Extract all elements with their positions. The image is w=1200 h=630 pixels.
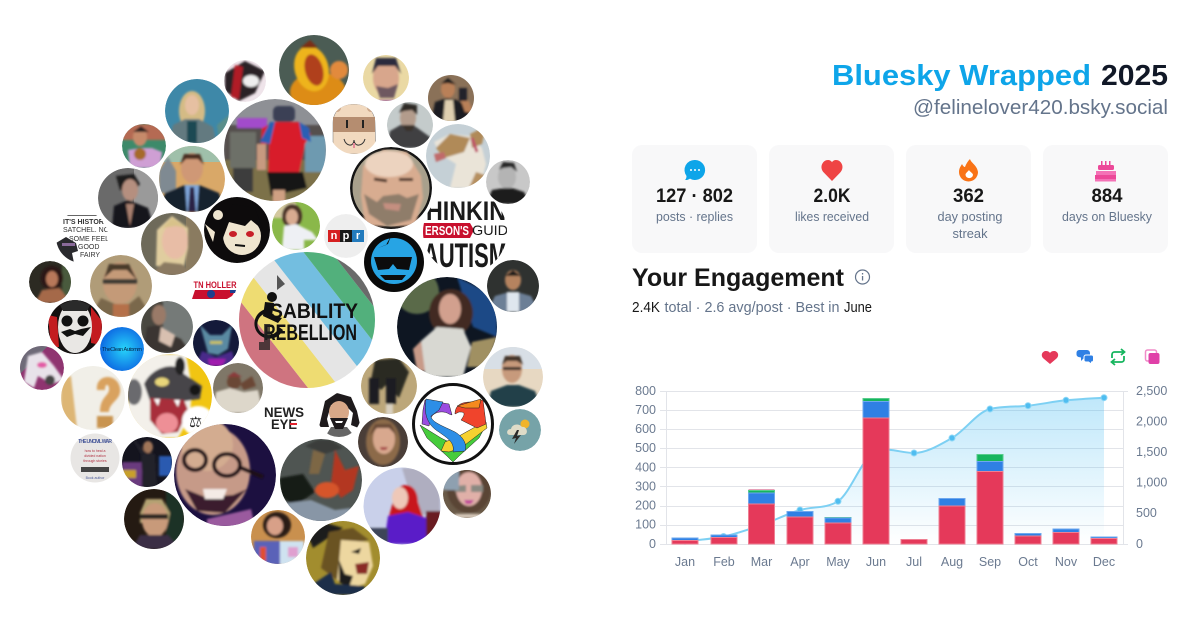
chart: monthly engagement stacked bars with cumulative line — [635, 384, 1167, 569]
avatar: blond man with glasses in dark room — [124, 489, 184, 549]
right axis labels: 500 — [1136, 506, 1157, 520]
avatar: man in red shirt at festival — [224, 99, 326, 205]
avatar bubble cluster — [20, 35, 543, 595]
avatar: man taking mirror selfie — [428, 74, 474, 122]
avatar: News Eye logo: NEWS — [264, 404, 304, 420]
left axis labels: 700 — [635, 403, 656, 417]
avatar: blonde woman in city — [141, 213, 204, 275]
avatar: man in grey jacket — [387, 102, 434, 148]
avatar: book cover with small text: how to heal a — [85, 449, 105, 453]
avatar: black and white man with round glasses and mustache — [48, 299, 102, 354]
avatar: News Eye logo: EYE — [271, 416, 297, 432]
avatar: comic strip panel — [56, 215, 108, 262]
stat label: day posting — [938, 209, 1002, 224]
avatar: black and white man — [486, 160, 530, 204]
stat value: 884 — [1092, 186, 1123, 207]
avatar: smiling man with glasses — [174, 419, 276, 527]
avatar: TN Holler logo: TN HOLLER — [194, 280, 237, 290]
stat label: likes received — [795, 209, 869, 224]
title: Bluesky Wrapped — [832, 60, 1091, 92]
icon: chat bubble — [684, 160, 705, 180]
left axis labels: 300 — [635, 480, 656, 494]
avatar: rainbow heart ribbon logo — [414, 384, 492, 464]
avatar: blonde woman against blue sky — [165, 79, 231, 145]
avatar: woman reading a colorful book — [251, 510, 305, 565]
left axis labels: 400 — [635, 460, 656, 474]
left axis labels — [635, 384, 656, 551]
month labels: Mar — [751, 555, 772, 569]
cumulative area — [685, 398, 1104, 544]
month labels: Dec — [1093, 555, 1115, 569]
avatar: man in grey blazer — [487, 260, 539, 312]
avatar: Thinking Person's Guide to Autism logo: GUID — [472, 222, 508, 238]
stat label: posts · replies — [656, 209, 733, 224]
avatar: deer illustration — [426, 124, 490, 190]
month labels: Oct — [1018, 555, 1038, 569]
avatar: blue skull with sunglasses — [364, 232, 424, 292]
bar: Jan — [672, 538, 698, 544]
engagement summary: total · 2.6 avg/post · Best in — [664, 300, 840, 316]
panel: posts and replies stat — [632, 145, 757, 253]
avatar: angry yellow cartoon man — [306, 521, 380, 595]
avatar: Japanese dragon print — [280, 439, 362, 522]
avatar: man with glasses and floral shirt — [483, 347, 543, 407]
bar: Aug — [939, 498, 965, 544]
panel: likes stat — [769, 145, 894, 253]
month labels — [675, 555, 1115, 569]
left axis labels: 600 — [635, 422, 656, 436]
bar: Feb — [711, 535, 737, 544]
handle: @felinelover420.bsky.social — [913, 97, 1168, 119]
month labels: Nov — [1055, 555, 1078, 569]
panel: posting streak stat — [906, 145, 1031, 253]
avatar: comic strip panel: SATCHEL. NOT — [63, 227, 114, 234]
month labels: Jun — [866, 555, 886, 569]
left axis labels: 0 — [649, 537, 656, 551]
avatar: News Eye logo — [264, 404, 304, 432]
icon: reposts legend — [1112, 349, 1124, 365]
avatar: NPR logo: n — [331, 230, 338, 242]
icon: flame — [959, 159, 978, 182]
avatar: man with glasses and beard — [90, 255, 152, 317]
stacked bars — [672, 398, 1117, 544]
avatar: blue demon character — [193, 320, 239, 366]
avatar: golden question mark — [61, 366, 125, 430]
avatar: dark-haired person in black blazer — [98, 168, 158, 228]
avatar: book cover with small text: THE UNCIVIL WAR — [78, 439, 112, 445]
left axis labels: 200 — [635, 498, 656, 512]
avatar: Disability Rebellion logo: REBELLION — [264, 320, 357, 345]
avatar: comic strip panel: GOOD — [78, 244, 99, 251]
stat value: 362 — [953, 186, 984, 207]
bar: Oct — [1015, 534, 1041, 544]
avatar: man in red cap and white hoodie — [213, 363, 263, 413]
avatar: snarling badger cartoon: ⚖ — [189, 414, 202, 431]
chart legend icons — [1042, 349, 1160, 365]
bar: Mar — [748, 489, 774, 544]
avatar: NPR logo: p — [343, 230, 350, 242]
avatar: woman with long brown hair — [358, 417, 408, 467]
right axis labels: 2,000 — [1136, 414, 1167, 428]
avatar: man in suit with capitol — [159, 146, 225, 212]
avatar: woman with curly dark hair — [29, 261, 72, 303]
avatar: comic strip panel: FAIRY — [80, 252, 100, 259]
icon: birthday cake — [1095, 161, 1116, 182]
avatar: woman in white shirt among flowers — [395, 270, 497, 377]
avatar: comic strip panel: SOME FEEL- — [69, 236, 112, 243]
engagement summary: 2.4K — [632, 300, 660, 316]
avatar: hamster cartoon — [333, 104, 376, 154]
left axis labels: 500 — [635, 441, 656, 455]
avatar: pink and white wolf — [20, 346, 64, 390]
bar: Apr — [787, 512, 813, 544]
avatar: blue glossy ball — [100, 327, 144, 371]
month labels: Apr — [790, 555, 810, 569]
month labels: Jul — [906, 555, 922, 569]
title: 2025 — [1101, 60, 1168, 92]
avatar: book cover with small text — [70, 434, 120, 482]
icon: info — [856, 270, 870, 284]
stat value: 2.0K — [814, 186, 851, 207]
avatar: NPR logo — [324, 214, 368, 258]
avatar: man on stage — [122, 437, 172, 487]
bar: Dec — [1091, 537, 1117, 544]
month labels: Aug — [941, 555, 963, 569]
avatar: orange lion cartoon — [279, 35, 349, 112]
avatar: rock with shadow silhouette — [361, 358, 417, 416]
icon: likes legend — [1042, 351, 1058, 364]
left axis labels: 100 — [635, 518, 656, 532]
avatar: TN Holler logo — [192, 280, 237, 299]
avatar: Thinking Person's Guide to Autism logo: HINKIN — [426, 196, 506, 226]
cumulative line — [685, 398, 1104, 541]
avatar: Disability Rebellion logo: SABILITY — [270, 300, 358, 323]
right axis labels: 0 — [1136, 537, 1143, 551]
avatar: goth anime girl — [204, 197, 270, 263]
panel: days on Bluesky stat — [1043, 145, 1168, 253]
engagement summary: June — [844, 300, 872, 316]
left axis labels: 800 — [635, 384, 656, 398]
avatar: Thinking Person's Guide to Autism logo — [423, 202, 507, 268]
stat value: 127 · 802 — [656, 186, 733, 207]
heading: Your Engagement: Your Engagement — [632, 264, 845, 292]
month labels: Jan — [675, 555, 695, 569]
bar: May — [825, 518, 851, 544]
avatar: snarling badger cartoon — [126, 354, 214, 438]
icon: heart — [821, 160, 843, 181]
avatar: Disability Rebellion logo — [239, 252, 375, 388]
right axis labels — [1136, 384, 1167, 551]
month labels: May — [826, 555, 851, 569]
avatar: long-haired bearded cartoon man — [317, 393, 361, 437]
month labels: Feb — [713, 555, 735, 569]
avatar: red-haired woman in purple — [364, 468, 441, 544]
avatar: man holding coconut — [122, 124, 166, 168]
chart gridlines — [660, 391, 1128, 544]
avatar: NPR logo: r — [356, 230, 361, 242]
stat label second line: streak — [952, 226, 988, 241]
right axis labels: 2,500 — [1136, 384, 1167, 398]
month labels: Sep — [979, 555, 1001, 569]
avatar: book cover with small text: through stories — [83, 459, 107, 463]
avatar: Thinking Person's Guide to Autism logo: AUTISM — [423, 237, 507, 275]
avatar: storm cloud on teal — [499, 409, 541, 451]
line data points — [682, 395, 1107, 544]
icon: quotes legend — [1146, 350, 1160, 364]
avatar: blue glossy ball: TheClean Automm — [102, 347, 142, 353]
avatar: book cover with small text: divided nation — [84, 454, 106, 458]
bar: Sep — [977, 454, 1003, 544]
avatar: Thinking Person's Guide to Autism logo: ERSON'S — [425, 223, 469, 238]
avatar: red and black character — [224, 60, 266, 102]
avatar: woman with curly hair and glasses — [443, 465, 491, 518]
right axis labels: 1,500 — [1136, 445, 1167, 459]
bar: Jul — [901, 540, 927, 544]
avatar: comic strip panel: IT'S HISTOR — [63, 219, 104, 226]
avatar: book cover with small text: Book author — [86, 476, 105, 480]
bar: Jun — [863, 398, 889, 544]
avatar: man with dark hair on yellow — [363, 55, 409, 104]
avatar: man in dark coat — [141, 301, 193, 353]
icon: replies legend — [1076, 350, 1094, 364]
right axis labels: 1,000 — [1136, 476, 1167, 490]
avatar: bald man with beard — [350, 147, 432, 229]
stat label: days on Bluesky — [1062, 209, 1152, 224]
avatar: woman in white top with greenery — [272, 202, 320, 250]
bar: Nov — [1053, 529, 1079, 544]
